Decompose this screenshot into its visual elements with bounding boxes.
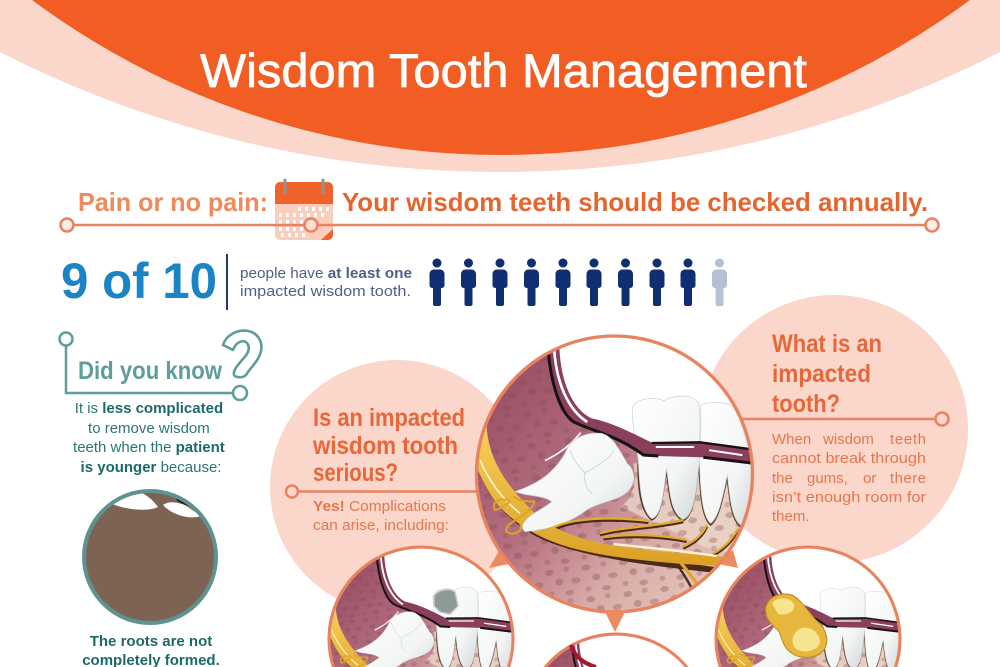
icon: question mark	[223, 331, 261, 377]
illustration: tooth decay complication	[327, 546, 515, 667]
serious connector	[286, 486, 480, 498]
inflamed gum	[571, 645, 596, 667]
did you know frame	[60, 332, 247, 400]
circular image: forming tooth roots	[84, 491, 216, 623]
serious heading: wisdom tooth	[312, 432, 458, 460]
definition body text: the	[772, 470, 793, 487]
definition connector	[740, 412, 948, 426]
banner text: pain or no pain: Pain or no pain:	[78, 187, 268, 217]
icon: calendar	[275, 180, 333, 240]
definition body text: When	[772, 431, 811, 448]
serious panel background	[270, 360, 524, 614]
panel: what is an impacted tooth	[700, 295, 968, 563]
definition heading: What is an	[772, 330, 882, 358]
did you know body text: teeth when the patient	[73, 439, 225, 456]
definition body text: isn’t enough room for	[772, 489, 926, 506]
definition body text: gums,	[807, 470, 848, 487]
banner text: annual check: Your wisdom teeth should be checked annually.	[342, 187, 928, 217]
statistic: 9 of 10: 9 of 10	[61, 253, 217, 309]
definition body text: cannot break through	[772, 450, 926, 467]
panel: is an impacted tooth serious	[270, 360, 524, 614]
did you know body text: to remove wisdom	[88, 420, 210, 437]
scene artwork	[474, 334, 754, 614]
definition body text: there	[890, 470, 926, 487]
main illustration: impacted wisdom tooth	[474, 334, 754, 614]
did you know body text: is younger because:	[81, 459, 221, 476]
serious body text: can arise, including:	[313, 517, 449, 534]
illustration: cyst complication	[714, 546, 902, 667]
serious body text: Yes! Complications	[313, 498, 443, 515]
caption: roots not formed: The roots are not	[90, 633, 212, 650]
connecting arrow to middle circle	[604, 610, 626, 632]
definition body text: or	[863, 470, 876, 487]
definition heading: impacted	[772, 360, 871, 388]
did you know heading: Did you know	[78, 357, 222, 385]
serious heading: Is an impacted	[313, 404, 465, 432]
decay on neighbouring tooth	[434, 590, 458, 614]
pictogram: 9 of 10 people	[430, 258, 727, 306]
definition body text: wisdom	[822, 431, 874, 448]
definition body text: them.	[772, 508, 810, 525]
panel: did you know	[60, 331, 261, 667]
title: Wisdom Tooth Management	[200, 44, 807, 97]
pointer triangles	[489, 550, 738, 568]
serious heading: serious?	[313, 459, 398, 487]
statistic divider	[226, 254, 228, 310]
definition heading: tooth?	[772, 390, 840, 418]
annual check banner	[60, 180, 938, 240]
background arc: pale pink	[0, 0, 1000, 172]
statistic description: people have at least one	[240, 265, 410, 282]
definition panel background	[700, 295, 968, 563]
did you know body text: It is less complicated	[75, 400, 223, 417]
illustration: middle complication	[544, 632, 688, 667]
definition body text: teeth	[890, 431, 926, 448]
cyst	[766, 594, 827, 657]
header arc: orange	[0, 0, 1000, 155]
statistic description: impacted wisdom tooth.	[240, 283, 411, 300]
banner line with nodes	[60, 218, 938, 232]
